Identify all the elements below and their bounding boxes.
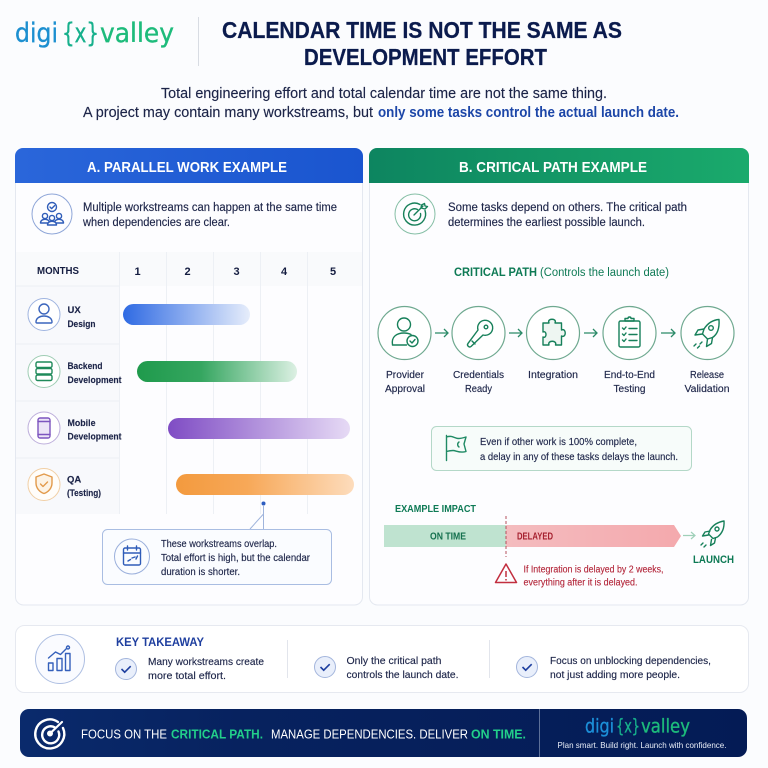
panel B intro text: Some tasks depend on others. The critical path [448, 202, 687, 214]
callout text: a delay in any of these tasks delays the launch. [480, 451, 678, 463]
header divider [198, 17, 199, 66]
step: release validation: Release [690, 370, 724, 381]
panel B intro text: determines the earliest possible launch. [448, 217, 645, 229]
timeline: on time vs delayed: DELAYED [517, 532, 553, 542]
step: credentials ready: Ready [465, 384, 492, 395]
takeaway 1: Many workstreams create [148, 656, 264, 668]
step: integration: Integration [528, 370, 578, 381]
month numbers: 2 [184, 266, 191, 278]
takeaway divider 1 [287, 640, 288, 678]
axis label: months: MONTHS [37, 265, 79, 277]
row: QA testing [28, 468, 354, 500]
panel A header [15, 148, 363, 183]
step: integration [526, 306, 580, 381]
icon: launch rocket [701, 521, 724, 547]
takeaway 1 [116, 656, 264, 682]
step: end-to-end testing [603, 306, 656, 395]
row: QA testing: QA [67, 474, 81, 486]
callout text: These workstreams overlap. [161, 539, 277, 550]
step: release validation [681, 306, 734, 395]
example impact label: EXAMPLE IMPACT [395, 503, 476, 515]
icon: growth chart [36, 634, 84, 684]
callout text: Even if other work is 100% complete, [480, 436, 637, 448]
takeaway divider 2 [489, 640, 490, 678]
subtitle: A project may contain many workstreams, but [83, 105, 373, 121]
takeaway 3 [516, 655, 711, 681]
critical path label [454, 267, 669, 279]
row: UX design: UX [68, 305, 81, 316]
month numbers [134, 266, 336, 278]
panel B intro text [448, 202, 687, 229]
title: CALENDAR TIME IS NOT THE SAME AS [222, 17, 622, 43]
delay warning text: If Integration is delayed by 2 weeks, [524, 564, 664, 576]
step: end-to-end testing: End-to-End [604, 370, 655, 381]
logo: digi{x}valley: digi [15, 18, 58, 49]
icon: flag [446, 436, 466, 460]
icon: calendar [114, 539, 150, 574]
footer logo: valley [641, 716, 690, 738]
logo: digi{x}valley: valley [100, 18, 174, 49]
row: backend development: Backend [68, 361, 103, 372]
panel B heading: B. CRITICAL PATH EXAMPLE [459, 159, 647, 176]
month numbers: 1 [134, 266, 141, 278]
arrow 2 [509, 329, 522, 337]
delay warning text [524, 564, 664, 588]
takeaway 2: controls the launch date. [346, 669, 458, 681]
row: mobile development [28, 412, 350, 444]
footer logo: {x} [616, 716, 640, 738]
row: UX design: Design [68, 319, 96, 330]
takeaway 3: not just adding more people. [550, 669, 680, 681]
footer banner [20, 709, 747, 757]
footer message [81, 728, 526, 742]
delay warning text: everything after it is delayed. [524, 578, 638, 588]
subtitle: Total engineering effort and total calendar time are not the same thing. [161, 86, 607, 102]
callout text [480, 436, 678, 463]
row: backend development [28, 356, 297, 388]
subtitle: only some tasks control the actual launch date. [378, 105, 679, 121]
icon: target white [35, 719, 64, 748]
footer logo: digi [585, 716, 614, 738]
step: provider approval [378, 306, 431, 395]
callout text [161, 539, 311, 578]
step: credentials ready [452, 306, 505, 395]
callout text: Total effort is high, but the calendar [161, 553, 311, 564]
month numbers: 4 [281, 266, 288, 278]
panel A intro text: Multiple workstreams can happen at the same time [83, 202, 337, 214]
icon: target [395, 194, 435, 234]
icon: team with check [32, 194, 72, 234]
footer tagline: Plan smart. Build right. Launch with confidence. [558, 740, 726, 750]
row: backend development: Development [68, 375, 122, 386]
panel: B. critical path example [369, 148, 749, 605]
callout: delay warning [432, 426, 692, 470]
row: mobile development: Development [68, 432, 122, 442]
title: DEVELOPMENT EFFORT [304, 44, 547, 70]
callout text: duration is shorter. [161, 567, 240, 578]
month numbers: 3 [233, 266, 240, 278]
logo: digi{x}valley [15, 18, 174, 49]
panel: key takeaway [16, 626, 748, 692]
footer message: ON TIME. [471, 728, 526, 742]
key takeaway heading: KEY TAKEAWAY [116, 635, 204, 649]
launch label: LAUNCH [693, 554, 734, 566]
gantt chart [16, 252, 362, 514]
panel A heading: A. PARALLEL WORK EXAMPLE [87, 159, 287, 176]
timeline: on time vs delayed: ON TIME [430, 532, 466, 542]
footer message: CRITICAL PATH. [171, 728, 263, 742]
footer message: MANAGE DEPENDENCIES. DELIVER [271, 728, 468, 742]
footer logo [585, 716, 690, 738]
step: end-to-end testing: Testing [614, 384, 646, 395]
panel B header [369, 148, 749, 183]
arrow 1 [435, 329, 448, 337]
step: release validation: Validation [684, 384, 730, 395]
logo: digi{x}valley: {x} [62, 18, 99, 49]
critical path label: CRITICAL PATH [454, 267, 537, 279]
month numbers: 5 [330, 266, 336, 278]
row: QA testing: (Testing) [67, 488, 101, 499]
row: mobile development: Mobile [68, 418, 96, 429]
step: credentials ready: Credentials [453, 370, 504, 381]
timeline: on time vs delayed [384, 516, 695, 557]
subtitle [83, 86, 679, 121]
panel A intro text [82, 202, 337, 229]
arrow 4 [661, 329, 675, 337]
takeaway 2: Only the critical path [346, 655, 442, 667]
takeaway 1: more total effort. [148, 670, 226, 682]
critical path label: (Controls the launch date) [540, 267, 669, 279]
panel A intro text: when dependencies are clear. [82, 217, 230, 229]
takeaway 2 [314, 655, 458, 681]
takeaway 3: Focus on unblocking dependencies, [550, 655, 711, 667]
callout: overlap note [102, 502, 332, 584]
arrow 3 [584, 329, 597, 337]
footer message: FOCUS ON THE [81, 728, 167, 742]
step: provider approval: Provider [386, 370, 425, 381]
footer divider [539, 709, 540, 757]
panel: A. parallel work example [15, 148, 363, 605]
icon: warning triangle [496, 564, 516, 582]
title [222, 17, 622, 70]
row: UX design [28, 298, 250, 330]
step: provider approval: Approval [385, 384, 425, 395]
